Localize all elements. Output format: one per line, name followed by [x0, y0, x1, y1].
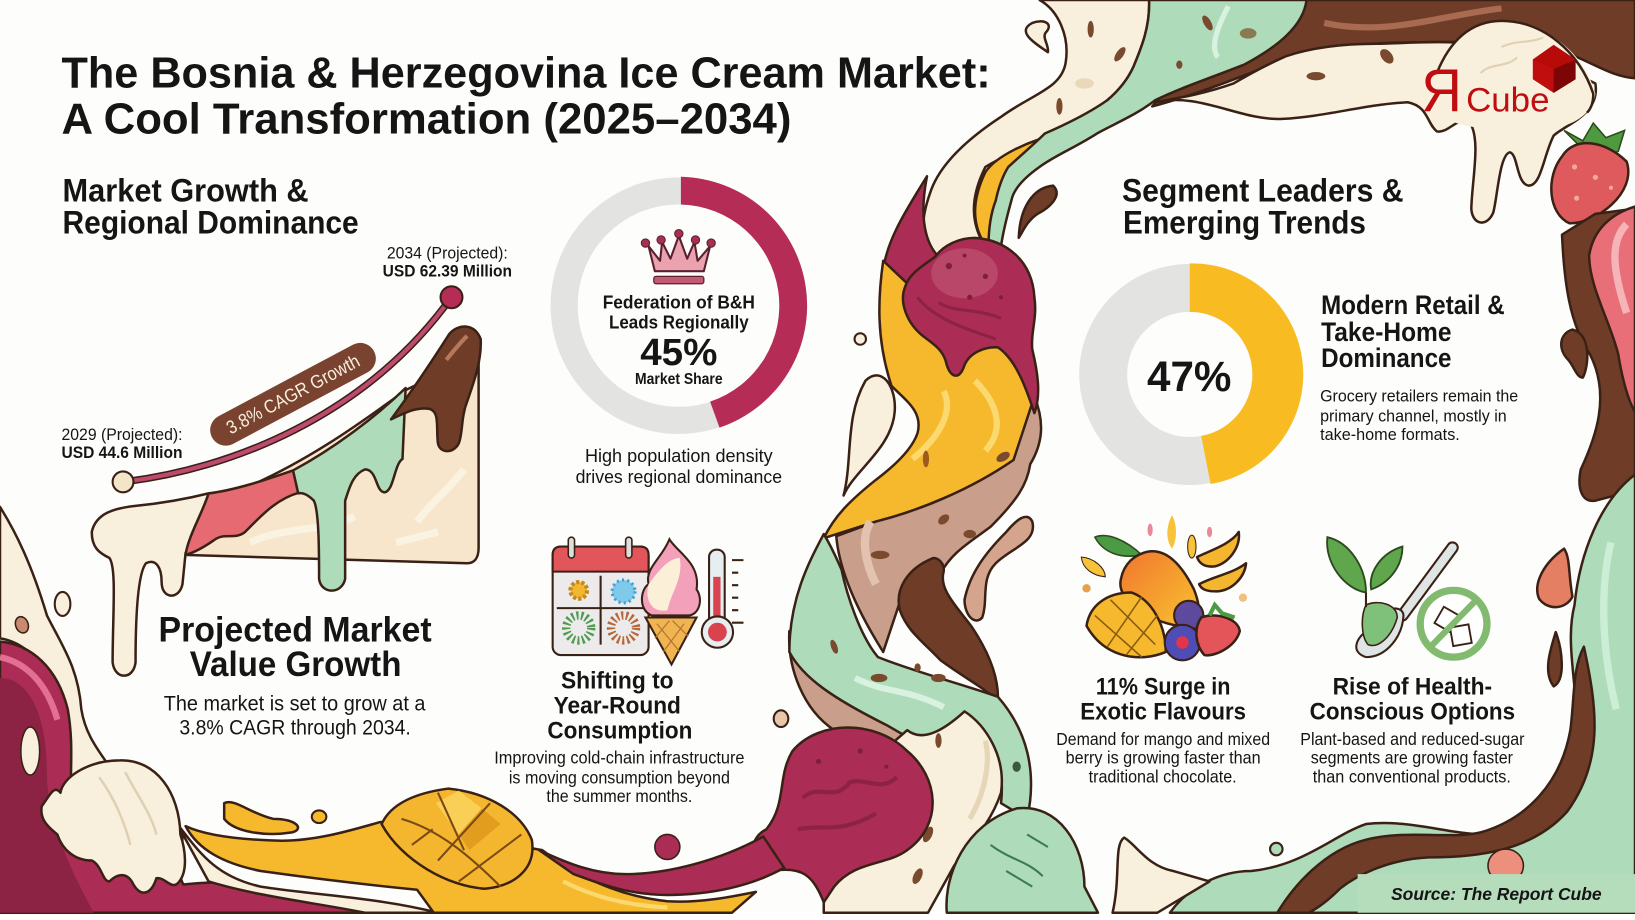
text block: year-round consumption: the summer months. [546, 786, 692, 806]
donut chart: 45% market share: Market Share [635, 371, 723, 388]
logo: RCube [1421, 45, 1576, 125]
text block: health-conscious options: Conscious Options [1310, 699, 1515, 726]
decorative swirl: right side chocolate, strawberry and mint [1170, 207, 1635, 913]
title [62, 49, 991, 144]
text block: year-round consumption: Shifting to [561, 667, 674, 694]
text block: year-round consumption: Improving cold-chain infrastructure [494, 748, 745, 768]
text block: health-conscious options [1300, 674, 1525, 786]
text block: health-conscious options: Rise of Health- [1333, 674, 1492, 701]
text block: modern retail: take-home formats. [1320, 425, 1460, 444]
text block: projected market value growth [158, 609, 432, 739]
logo: RCube: Я [1421, 57, 1462, 125]
panel: market growth and regional dominance [62, 172, 807, 806]
decorative swirl: top right chocolate, cream and mint [923, 0, 1635, 261]
panel: segment leaders and emerging trends [1056, 172, 1525, 786]
title: The Bosnia & Herzegovina Ice Cream Market: [62, 49, 991, 98]
text block: health-conscious options: than conventional products. [1313, 766, 1511, 786]
text block: modern retail [1320, 289, 1518, 444]
title: A Cool Transformation (2025–2034) [62, 95, 791, 144]
heading: segment leaders [1122, 172, 1404, 241]
logo: RCube: Cube [1466, 82, 1549, 120]
chart: melting ice cream growth wedge [92, 286, 481, 676]
text block: exotic flavours: berry is growing faster than [1066, 748, 1261, 768]
text block: population density [576, 445, 782, 487]
text block: modern retail: Grocery retailers remain the [1320, 387, 1518, 406]
label: 2034 value [383, 244, 512, 280]
label: 2034 value: USD 62.39 Million [383, 261, 512, 280]
chart line: 3.8% growth curve [113, 286, 462, 492]
heading: market growth [63, 172, 359, 241]
text block: health-conscious options: segments are growing faster [1311, 748, 1513, 768]
label: CAGR pill: 3.8% CAGR Growth [223, 350, 363, 438]
text block: projected market value growth: Projected Market [158, 609, 432, 649]
text block: year-round consumption: Year-Round [554, 692, 681, 719]
icon: crown [641, 229, 715, 284]
label: 2029 value: USD 44.6 Million [62, 443, 182, 462]
donut chart: 47% modern retail: 47% [1147, 353, 1231, 401]
donut chart: 45% market share: Leads Regionally [609, 312, 749, 333]
source label: Source: The Report Cube [1391, 884, 1602, 904]
icon: exotic fruit [1081, 515, 1247, 660]
text block: year-round consumption: is moving consumption beyond [509, 767, 730, 787]
text block: year-round consumption [494, 667, 745, 806]
text block: modern retail: Take-Home [1321, 316, 1451, 347]
donut chart: 45% market share: 45% [640, 331, 717, 373]
text block: projected market value growth: 3.8% CAGR through 2034. [179, 716, 411, 739]
decorative swirl: bottom left crimson, cream and yellow [0, 507, 788, 913]
heading: segment leaders: Emerging Trends [1123, 205, 1366, 241]
text block: population density: drives regional dominance [576, 466, 782, 487]
text block: year-round consumption: Consumption [547, 717, 692, 745]
text block: exotic flavours: traditional chocolate. [1089, 766, 1237, 786]
icon: strawberry [1551, 123, 1628, 223]
label: 2034 value: 2034 (Projected): [387, 244, 508, 263]
text block: health-conscious options: Plant-based and reduced-sugar [1300, 729, 1525, 749]
donut chart: 47% modern retail [1103, 263, 1303, 484]
label: 2029 value [62, 425, 182, 462]
text block: projected market value growth: Value Growth [190, 644, 401, 684]
text block: exotic flavours [1056, 674, 1270, 786]
text block: modern retail: Dominance [1321, 342, 1451, 373]
text block: modern retail: Modern Retail & [1321, 289, 1505, 320]
text block: exotic flavours: Exotic Flavours [1080, 699, 1246, 726]
heading: market growth: Market Growth & [63, 172, 309, 208]
decorative swirl: centre stream [753, 21, 1283, 913]
source label [1358, 874, 1635, 913]
text block: exotic flavours: Demand for mango and mixed [1056, 729, 1270, 749]
icon: cut mango half [382, 789, 532, 889]
icon: calendar, cone and thermometer [553, 537, 743, 664]
donut chart: 45% market share: Federation of B&H [603, 292, 755, 313]
text block: projected market value growth: The market is set to grow at a [164, 692, 426, 715]
text block: population density: High population density [585, 445, 773, 466]
text block: exotic flavours: 11% Surge in [1096, 674, 1230, 701]
donut chart: 45% market share [564, 177, 807, 428]
heading: segment leaders: Segment Leaders & [1122, 172, 1404, 208]
text block: modern retail: primary channel, mostly in [1320, 406, 1507, 425]
heading: market growth: Regional Dominance [63, 205, 359, 241]
icon: plant spoon and no sugar [1327, 537, 1487, 657]
label: 2029 value: 2029 (Projected): [62, 425, 182, 444]
